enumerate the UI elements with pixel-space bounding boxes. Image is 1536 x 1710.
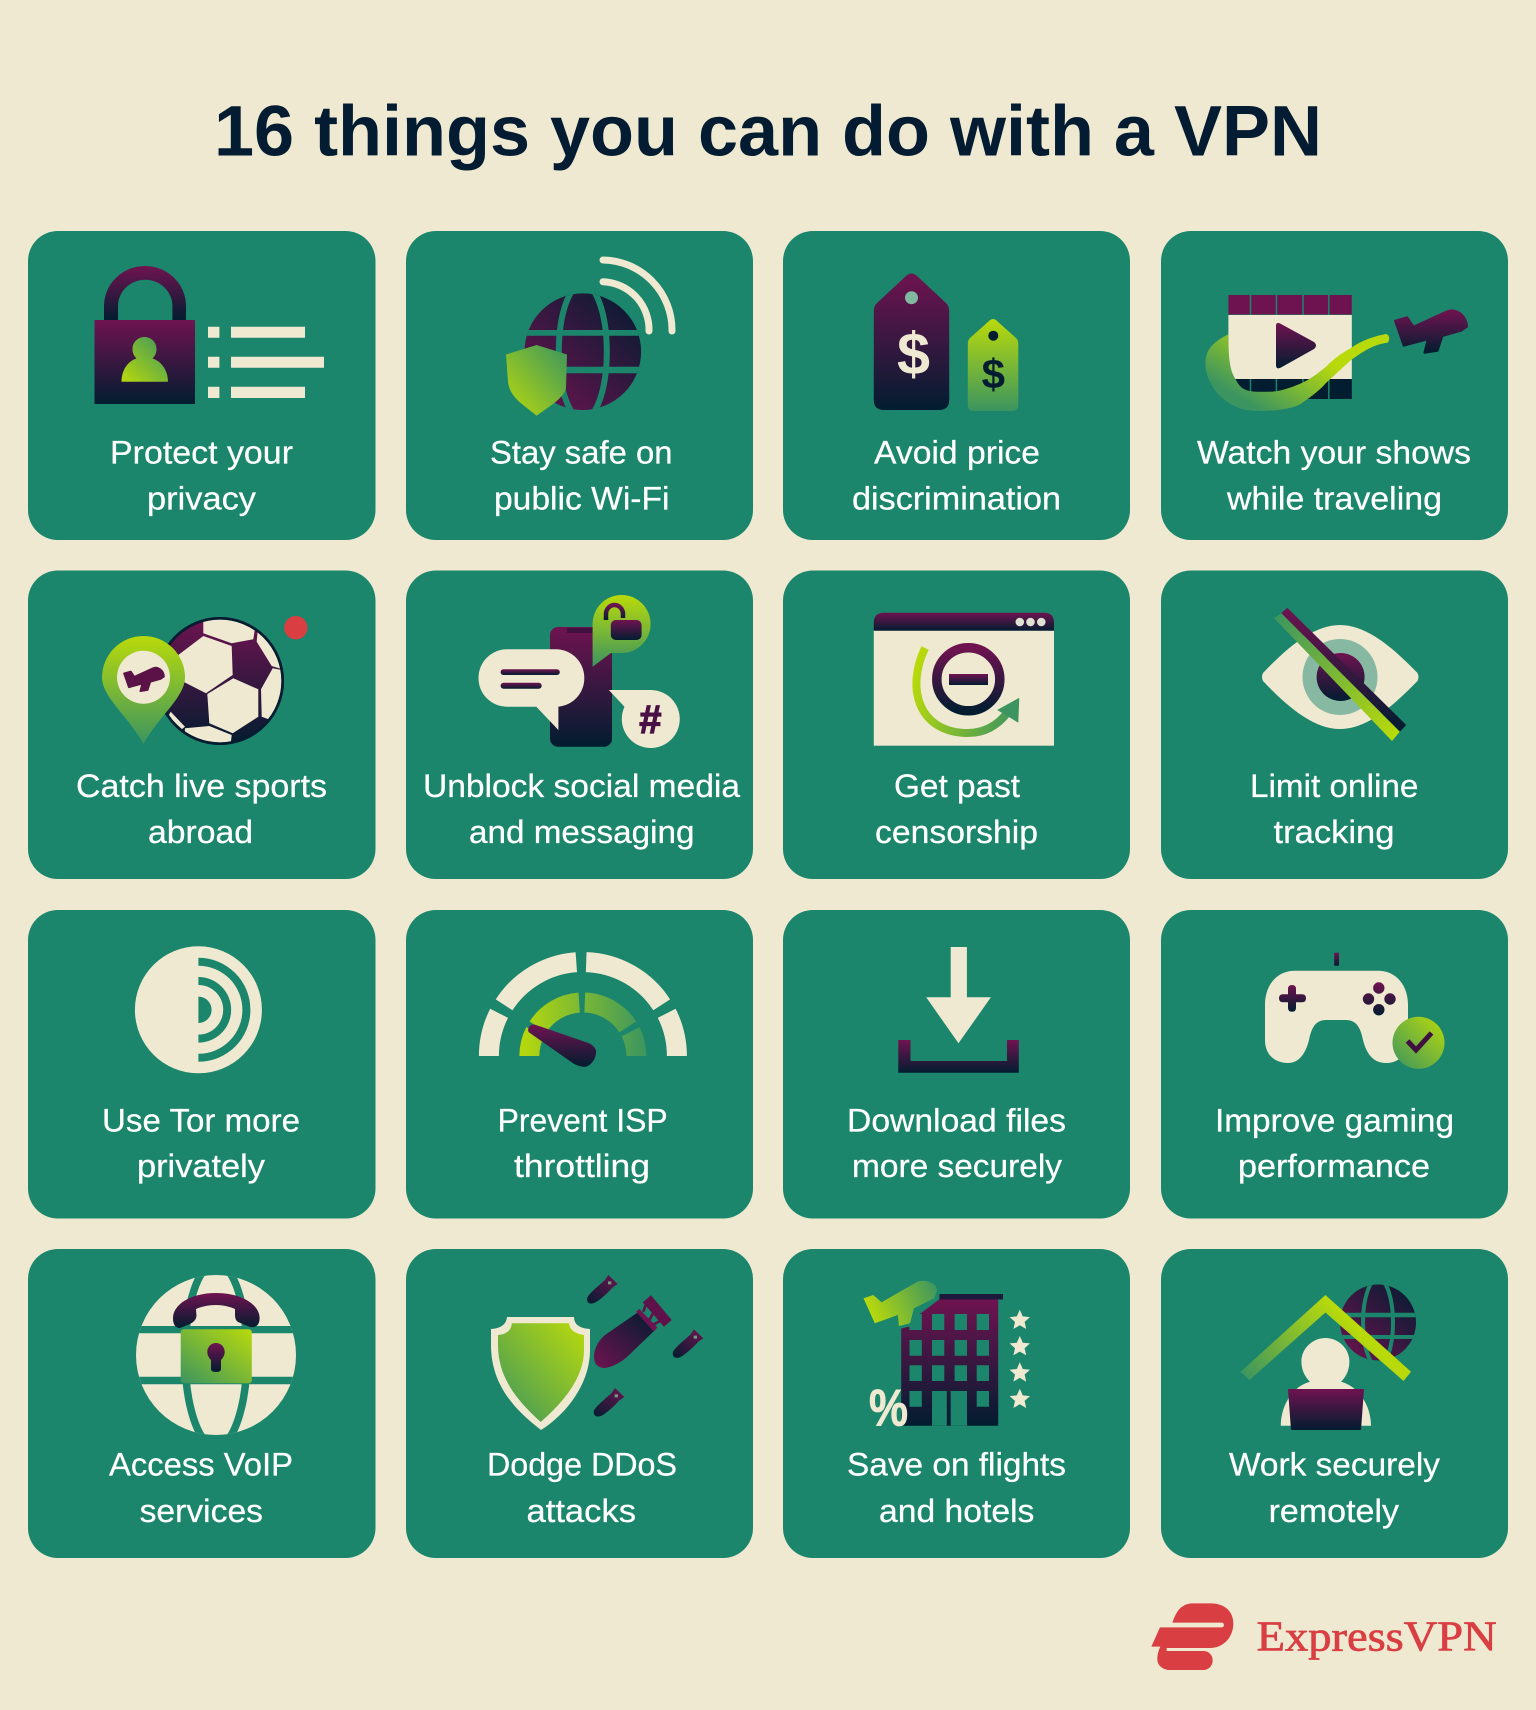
icon: Tor onion	[135, 946, 262, 1073]
label: while traveling	[1226, 480, 1442, 516]
icon: browser window with blocked sign	[874, 613, 1054, 746]
label	[1197, 434, 1471, 516]
label	[852, 434, 1061, 516]
label	[76, 768, 327, 850]
label: Avoid price	[874, 434, 1040, 470]
panel: Work securely remotely	[1161, 1249, 1508, 1558]
icon: video player, plane and swoosh	[1205, 295, 1467, 411]
panel: Access VoIP services	[28, 1249, 376, 1558]
icon: globe with phone lock	[136, 1275, 296, 1435]
label	[102, 1103, 300, 1184]
label: Save on flights	[847, 1446, 1066, 1482]
panel: Prevent ISP throttling	[406, 910, 753, 1218]
label	[847, 1446, 1066, 1529]
icon: price tags: $	[897, 321, 930, 387]
label: censorship	[875, 814, 1038, 850]
panel: Improve gaming performance	[1161, 910, 1508, 1218]
icon: padlock with person and list	[94, 266, 324, 404]
card background	[783, 570, 1130, 879]
panel: Protect your privacy	[28, 231, 376, 540]
label	[875, 768, 1038, 850]
panel: Save on flights and hotels	[783, 1249, 1130, 1558]
label: remotely	[1269, 1493, 1400, 1529]
label: Protect your	[110, 434, 293, 470]
panel: Download files more securely	[783, 910, 1130, 1218]
logo wordmark: ExpressVPN	[1257, 1615, 1497, 1661]
panel: Dodge DDoS attacks	[406, 1249, 753, 1558]
title: 16 things you can do with a VPN	[214, 93, 1322, 172]
label	[487, 1446, 677, 1529]
label: tracking	[1274, 814, 1394, 850]
label: public Wi-Fi	[494, 480, 670, 516]
label	[423, 768, 741, 850]
card background	[28, 910, 376, 1218]
card background	[406, 910, 753, 1218]
icon: ExpressVPN mark	[1151, 1603, 1233, 1670]
label: Prevent ISP	[498, 1103, 668, 1139]
label: and hotels	[879, 1493, 1034, 1529]
label: privacy	[147, 480, 257, 516]
label: discrimination	[852, 480, 1061, 516]
label: Catch live sports	[76, 768, 327, 804]
label: Dodge DDoS	[487, 1446, 677, 1482]
panel: Catch live sports abroad	[28, 570, 376, 879]
card background	[783, 1249, 1130, 1558]
label: Access VoIP	[109, 1446, 293, 1482]
label: throttling	[514, 1148, 650, 1184]
label	[109, 1446, 293, 1529]
label	[1229, 1446, 1441, 1529]
icon: shield and missiles	[491, 1275, 703, 1430]
icon: price tags	[874, 274, 1018, 411]
icon: download arrow and tray	[898, 947, 1019, 1073]
label: Get past	[894, 768, 1020, 804]
label: Download files	[847, 1103, 1066, 1139]
label: Watch your shows	[1197, 434, 1471, 470]
label: privately	[137, 1148, 266, 1184]
panel: Stay safe on public Wi-Fi	[406, 231, 753, 540]
label: more securely	[852, 1148, 1063, 1184]
label	[110, 434, 293, 516]
label: and messaging	[469, 814, 694, 850]
label: Limit online	[1250, 768, 1418, 804]
icon: hotel, plane, stars and percent	[864, 1281, 1030, 1438]
card background	[406, 231, 753, 540]
icon: speed gauge	[489, 962, 677, 1067]
panel: Use Tor more privately	[28, 910, 376, 1218]
card background	[406, 1249, 753, 1558]
icon: globe with wifi and shield	[506, 260, 672, 420]
icon: price tags: $	[982, 350, 1005, 398]
ExpressVPN logo	[1151, 1603, 1497, 1670]
card background	[1161, 570, 1508, 879]
label: Unblock social media	[423, 768, 741, 804]
label: abroad	[148, 814, 253, 850]
card background	[783, 231, 1130, 540]
icon: game controller with check badge	[1265, 953, 1444, 1069]
label	[490, 434, 672, 516]
panel: Watch your shows while traveling	[1161, 231, 1508, 540]
card background	[28, 1249, 376, 1558]
panel: Unblock social media and messaging	[406, 570, 753, 879]
label: Work securely	[1229, 1446, 1441, 1482]
label	[1250, 768, 1418, 850]
icon: hotel, plane, stars and percent: %	[869, 1380, 908, 1438]
label: Use Tor more	[102, 1103, 300, 1139]
card background	[28, 231, 376, 540]
panel: Avoid price discrimination	[783, 231, 1130, 540]
icon: phone with chat bubbles	[478, 595, 680, 748]
label	[847, 1103, 1066, 1184]
panel: Get past censorship	[783, 570, 1130, 879]
label	[1215, 1103, 1454, 1184]
label	[498, 1103, 668, 1184]
label: Stay safe on	[490, 434, 672, 470]
card background	[28, 570, 376, 879]
card background	[1161, 231, 1508, 540]
label: attacks	[526, 1493, 636, 1529]
panel: Limit online tracking	[1161, 570, 1508, 879]
card background	[1161, 1249, 1508, 1558]
label: Improve gaming	[1215, 1103, 1454, 1139]
card background	[406, 570, 753, 879]
icon: phone with chat bubbles: #	[639, 698, 662, 742]
icon: soccer ball with location pin	[102, 610, 307, 750]
card background	[1161, 910, 1508, 1218]
label: services	[140, 1493, 263, 1529]
icon: crossed-out eye	[1262, 608, 1418, 741]
card background	[783, 910, 1130, 1218]
label: performance	[1238, 1148, 1430, 1184]
icon: remote worker under roof with globe	[1241, 1278, 1418, 1430]
